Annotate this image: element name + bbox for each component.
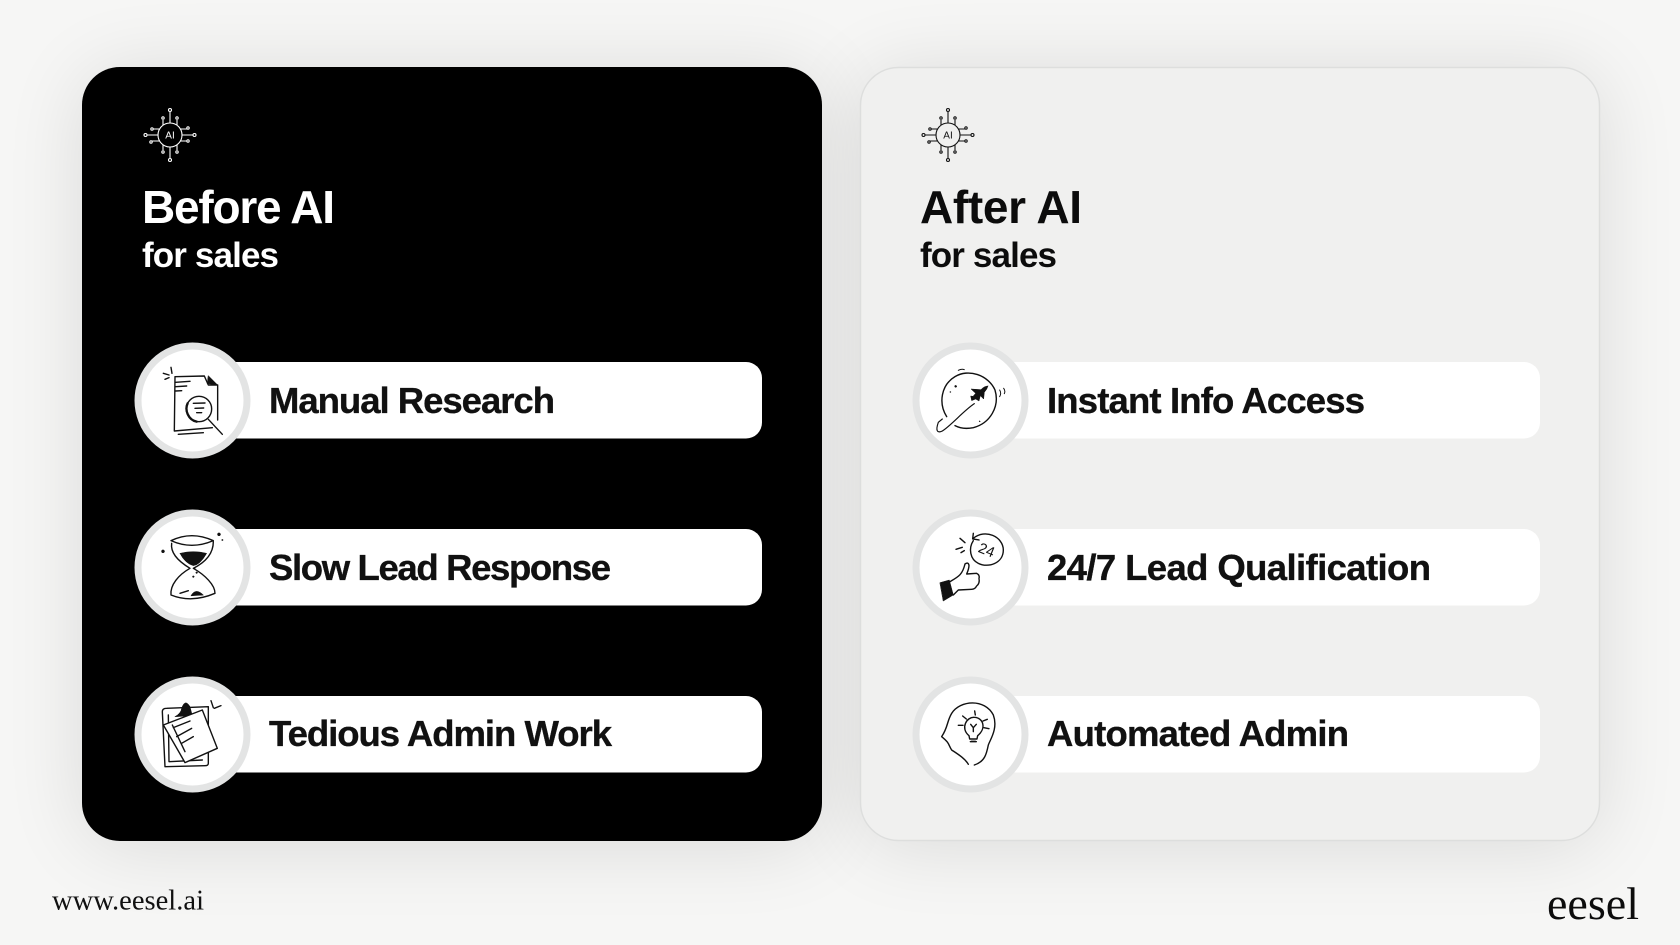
subheading: for sales: for sales <box>142 236 279 275</box>
label: Tedious Admin Work: Tedious Admin Work <box>269 713 613 754</box>
icon: thumbs up with 24: 24 <box>976 540 997 561</box>
footer: website url: www.eesel.ai <box>52 886 204 916</box>
icon: globe with plane <box>937 369 1005 432</box>
panel: after AI <box>860 68 1600 840</box>
icon: AI chip <box>144 108 196 162</box>
item: Instant Info Access <box>916 346 1540 455</box>
label: Instant Info Access: Instant Info Access <box>1047 380 1365 421</box>
icon: thumbs up with 24 <box>940 533 1003 601</box>
panel: before AI <box>82 67 822 841</box>
label: Manual Research: Manual Research <box>269 380 555 421</box>
item: Tedious Admin Work <box>138 680 762 789</box>
subheading: for sales: for sales <box>920 236 1057 275</box>
heading: Before AI: Before AI <box>142 181 335 233</box>
item: Slow Lead Response <box>138 513 762 622</box>
item: Manual Research <box>138 346 762 455</box>
item: Automated Admin <box>916 680 1540 789</box>
heading: After AI: After AI <box>920 181 1082 233</box>
icon: AI chip <box>922 108 974 162</box>
icon: clipboard <box>162 701 221 767</box>
icon: document with magnifier <box>163 367 222 434</box>
icon: AI chip: AI <box>165 130 175 142</box>
footer: eesel logo: eesel <box>1547 878 1639 929</box>
label: Slow Lead Response: Slow Lead Response <box>269 547 611 588</box>
icon: AI chip: AI <box>943 130 953 142</box>
label: Automated Admin: Automated Admin <box>1047 713 1349 754</box>
icon: head with lightbulb <box>942 703 995 765</box>
label: 24/7 Lead Qualification: 24/7 Lead Qualification <box>1047 547 1431 588</box>
item: 24/7 Lead Qualification <box>916 513 1540 622</box>
icon: hourglass <box>161 533 223 599</box>
